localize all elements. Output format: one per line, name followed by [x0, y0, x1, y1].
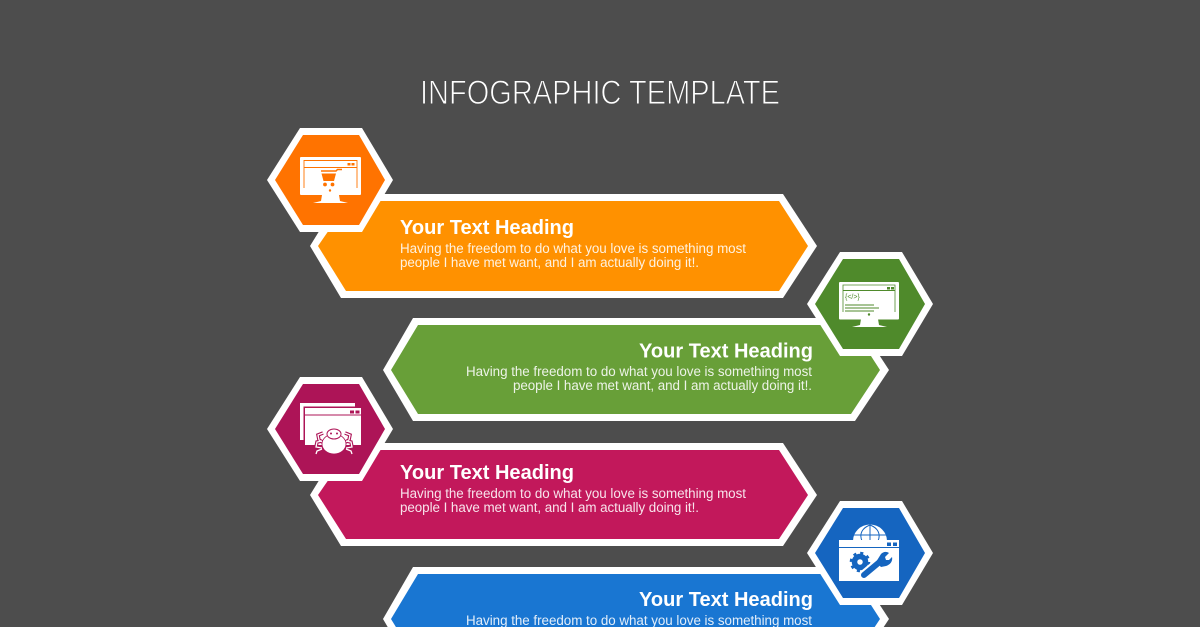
panel: blue band: [383, 567, 889, 627]
panel: orange band: [310, 194, 817, 298]
text: magenta body: [400, 486, 746, 515]
text: magenta body: Having the freedom to do what you love is something most: [400, 486, 746, 501]
icon: magenta hexagon with bug windows: [267, 377, 393, 481]
icon: blue hexagon with globe and tools: [807, 501, 933, 605]
text: green body: [466, 364, 812, 393]
panel: magenta band: [310, 443, 817, 546]
title: INFOGRAPHIC TEMPLATE: [420, 74, 780, 112]
text: magenta body: people I have met want, and I am actually doing it!.: [400, 500, 699, 515]
text: green body: people I have met want, and I am actually doing it!.: [513, 378, 812, 393]
text: orange body: people I have met want, and I am actually doing it!.: [400, 255, 699, 270]
icon: green hexagon with code monitor: [807, 252, 933, 356]
icon: orange hexagon with shopping monitor: [267, 128, 393, 232]
text: orange body: [400, 241, 746, 270]
heading: blue: Your Text Heading: [639, 588, 813, 611]
text: green body: Having the freedom to do what you love is something most: [466, 364, 812, 379]
heading: green: Your Text Heading: [639, 340, 813, 362]
heading: magenta: Your Text Heading: [400, 461, 574, 484]
text: orange body: Having the freedom to do what you love is something most: [400, 241, 746, 256]
heading: orange: Your Text Heading: [400, 216, 574, 239]
panel: green band: [383, 318, 889, 421]
icon: green hexagon with code monitor: {</>}: [845, 294, 860, 301]
